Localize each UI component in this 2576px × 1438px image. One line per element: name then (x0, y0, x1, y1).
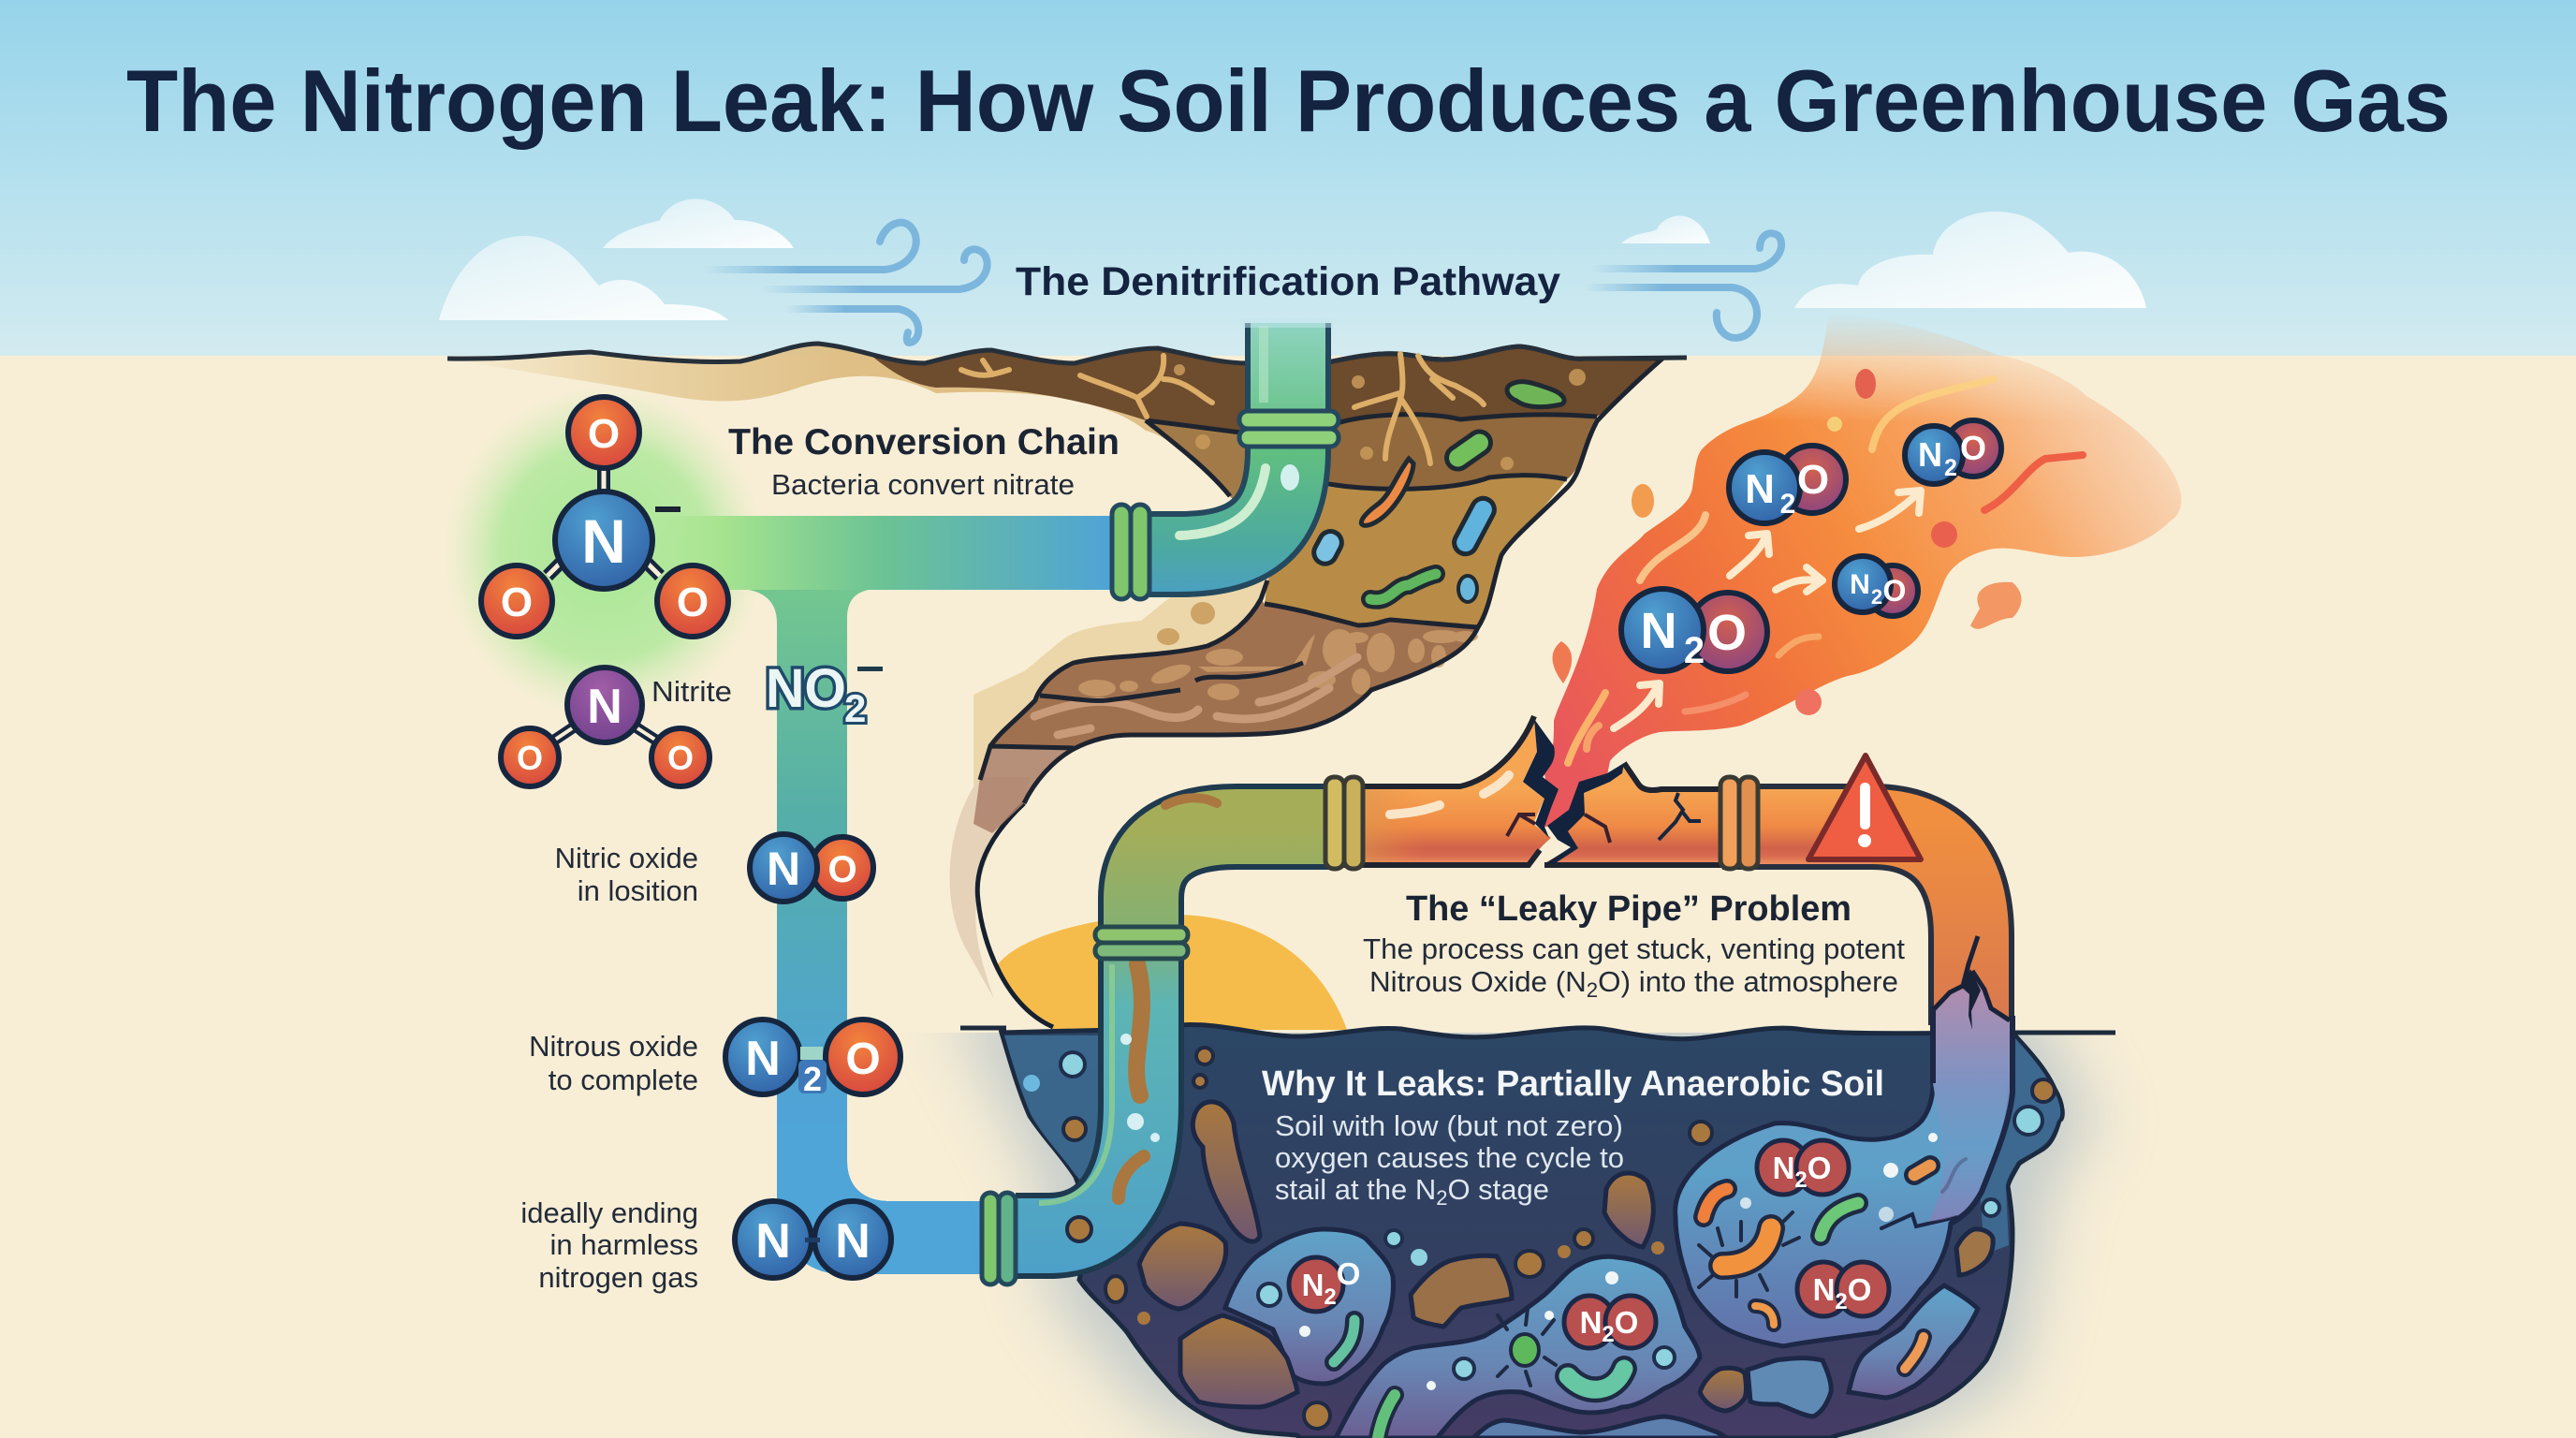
pipe segment: horizontal run (646, 516, 1114, 590)
plume molecule medium: 2 (1780, 489, 1795, 520)
leaky pipe description (1363, 932, 1905, 1002)
anaerobic soil description (1275, 1109, 1624, 1210)
plume molecule top: N (1918, 435, 1942, 474)
molecule: nitric oxide (750, 834, 873, 902)
soil left bright patch (1004, 1035, 1105, 1208)
nitrogen gas label (520, 1196, 698, 1294)
pocket: N2O molecules: O (1848, 1272, 1871, 1307)
broken pipe: left piece (1329, 716, 1551, 863)
broken pipe: outlines (1329, 716, 1741, 865)
pipe elbow to surface (1112, 318, 1339, 599)
pipe: lower elbow and vertical (1016, 827, 1329, 1236)
plume droplets (1552, 369, 2021, 715)
small blue cell (1458, 576, 1477, 602)
pipe: leaky section (1016, 798, 2012, 1241)
pocket: N2O molecules: O (1808, 1151, 1831, 1185)
green capsule (1442, 427, 1495, 474)
ochre layer (1265, 476, 1567, 627)
molecule: nitric oxide: N (767, 843, 800, 895)
anaerobic soil description: oxygen causes the cycle to (1275, 1141, 1624, 1174)
nitric oxide label: in losition (578, 874, 698, 907)
nitric oxide label (555, 842, 698, 907)
leaky pipe heading: The “Leaky Pipe” Problem (1406, 889, 1852, 929)
nitrogen gas label: nitrogen gas (538, 1261, 698, 1294)
anaerobic soil zone (1002, 1011, 2062, 1438)
small blue capsule (1310, 527, 1346, 567)
sky fade on pipe top (1240, 318, 1334, 328)
pocket: N2O molecules: N (1302, 1268, 1324, 1302)
plume molecule small: N (1850, 569, 1870, 600)
band markings (1078, 629, 1478, 700)
molecule: nitrite (501, 668, 710, 786)
gas pocket right merged with pipe outlet (1676, 1011, 2010, 1346)
molecule: nitrate: O (588, 411, 620, 457)
pocket: N2O molecules: 2 (1602, 1322, 1615, 1347)
plume molecule medium (1729, 446, 1846, 523)
pipe segment: bottom run tint (777, 1123, 985, 1274)
band root streaks (1034, 657, 1357, 735)
pipe: stone section sinking into soil (1928, 974, 2010, 1222)
sandy patch beneath horizontal pipe (973, 562, 1267, 786)
nitrous oxide label: Nitrous oxide (529, 1030, 698, 1063)
pocket: N2O molecules (1289, 1140, 1889, 1348)
panel outline (977, 803, 1053, 1027)
surface horizon line (447, 344, 1687, 363)
NO2- formula: 2 (844, 686, 866, 730)
pipe: first stage, nitrate green glow (443, 386, 765, 719)
plume wisps (1568, 379, 2083, 763)
pebbles (1157, 364, 1586, 645)
nitric oxide label: Nitric oxide (555, 842, 698, 874)
lower wedge (973, 746, 1074, 833)
conversion chain heading: The Conversion Chain (728, 422, 1120, 462)
medium brown layer (1328, 415, 1597, 489)
pipe collar horizontal (1112, 505, 1149, 599)
anaerobic soil description: stail at the N (1275, 1173, 1436, 1206)
molecule: nitrous oxide: O (845, 1034, 881, 1084)
top dark layer right of pipe (1328, 346, 1662, 426)
pipe collars upper (1325, 777, 1758, 869)
molecule: nitrous oxide (725, 1020, 900, 1098)
plume molecule medium: O (1797, 457, 1829, 503)
dark topsoil left (871, 348, 1248, 433)
lower brown band (993, 599, 1478, 749)
pocket: N2O molecules: 2 (1794, 1167, 1808, 1193)
NO2- formula: NO (766, 658, 846, 719)
soil haze around anaerobic zone (1002, 1033, 2059, 1438)
anaerobic soil description: Soil with low (but not zero) (1275, 1109, 1623, 1142)
wind swirls (704, 223, 1781, 343)
pocket: bacteria (1334, 1159, 1966, 1438)
soil haze behind panel (950, 777, 1030, 999)
molecule: nitrite: N (587, 680, 622, 734)
pipe collar vertical (1239, 411, 1339, 447)
tan surface layer (449, 344, 1248, 506)
gas pocket bottom (1473, 1416, 1727, 1438)
green blob (1507, 382, 1564, 407)
title: The Nitrogen Leak: How Soil Produces a Greenhouse Gas (126, 51, 2451, 150)
leaky pipe description: Nitrous Oxide (N (1369, 965, 1584, 998)
broken pipe: left tint (1329, 789, 1423, 863)
pocket: N2O molecules: 2 (1835, 1289, 1848, 1314)
molecule: nitrate: O (501, 580, 533, 625)
orange worm (1361, 459, 1413, 525)
broken pipe: right piece (1544, 763, 1741, 863)
plume arrows (1614, 491, 1921, 728)
leaky pipe description: O) into the atmosphere (1598, 965, 1898, 998)
leaky pipe description: The process can get stuck, venting potent (1363, 932, 1905, 965)
anaerobic soil heading: Why It Leaks: Partially Anaerobic Soil (1262, 1064, 1884, 1104)
plume molecule large: N (1640, 603, 1677, 659)
pipe collar lower (982, 1193, 1016, 1284)
pipe highlights (1390, 775, 1509, 814)
gas pocket lower right (1849, 1285, 1978, 1398)
nitrogen gas label: ideally ending (520, 1196, 698, 1229)
plume molecule large (1621, 589, 1767, 671)
sky background (0, 0, 2576, 356)
crack: right branch (1585, 814, 1610, 843)
crack: left branch (1507, 814, 1535, 836)
soil pebbles and bubbles (1023, 1048, 2055, 1429)
conversion chain caption: Bacteria convert nitrate (771, 468, 1075, 501)
molecule: nitrate: O (677, 580, 709, 625)
plume molecule top: O (1960, 429, 1986, 467)
pocket: N2O molecules: N (1813, 1272, 1835, 1307)
N2O gas plume (1540, 313, 2181, 829)
molecule: nitrate: N (581, 506, 626, 576)
pocket: N2O molecules: N (1773, 1151, 1794, 1185)
plume molecule medium: N (1745, 466, 1775, 512)
pocket: N2O molecules: O (1615, 1305, 1638, 1340)
yellow sun (998, 915, 1347, 1030)
cross-section of upper soil (447, 344, 1687, 833)
molecule: nitrogen gas (735, 1201, 891, 1278)
leaky pipe description: 2 (1587, 978, 1598, 1002)
molecule: nitrous oxide: N (745, 1032, 781, 1086)
molecule: nitric oxide: O (827, 849, 857, 890)
blue capsule (1450, 494, 1499, 558)
molecule: nitrite: O (667, 739, 694, 777)
roots (961, 354, 1484, 463)
gas pocket left (1225, 1229, 1393, 1384)
soil outline (980, 346, 1662, 803)
section heading: denitrification pathway: The Denitrification Pathway (1016, 259, 1560, 304)
molecule: nitrogen gas: N (755, 1214, 791, 1269)
anaerobic soil description: O stage (1447, 1173, 1549, 1206)
plume molecule small (1835, 556, 1918, 616)
pipe: conversion chain horizontal and vertical (646, 516, 1114, 1274)
NO2- formula (766, 658, 883, 730)
molecule: nitrous oxide: 2 (803, 1060, 822, 1098)
sand background (0, 356, 2576, 1438)
gas pocket middle (1336, 1256, 1700, 1438)
pipe stone crack (1934, 936, 2010, 1020)
pocket: N2O molecules: 2 (1324, 1284, 1337, 1310)
plume molecule small: 2 (1871, 585, 1882, 609)
pocket: N2O molecules: N (1580, 1305, 1602, 1340)
crack: right dark edge (1544, 763, 1624, 864)
pipe segment: vertical run (739, 589, 985, 1274)
nitrogen gas label: in harmless (550, 1228, 698, 1261)
pipe: right elbow (1722, 827, 1971, 1025)
soil rocks (1139, 1102, 1993, 1416)
plume molecule top (1905, 420, 2001, 484)
clouds (439, 198, 2146, 320)
soil right bright patch (1980, 1035, 2060, 1255)
nitrite label: Nitrite (651, 675, 732, 708)
plume molecule large: O (1707, 605, 1747, 661)
pocket: N2O molecules: O (1337, 1256, 1360, 1291)
soil surface line (960, 1028, 2115, 1033)
pipe collar vertical (1095, 927, 1188, 959)
molecule: nitrate (481, 397, 728, 637)
mid layer left of pipe (1146, 420, 1254, 524)
crack: left dark edge (1523, 719, 1559, 838)
molecule: nitrogen gas: N (835, 1214, 871, 1269)
anaerobic soil description: 2 (1436, 1186, 1447, 1210)
pipe stone tear (1961, 969, 1981, 1030)
molecule: nitrite: O (517, 739, 543, 777)
plume molecule large: 2 (1684, 630, 1705, 671)
plume molecule small: O (1883, 574, 1906, 608)
warning sign (1808, 756, 1921, 859)
nitrous oxide label (529, 1030, 698, 1096)
plume molecule top: 2 (1944, 455, 1957, 481)
small pipe crack (1659, 793, 1701, 840)
cracked orange pipe run (982, 716, 1758, 1284)
green worm (1370, 574, 1436, 600)
nitrous oxide label: to complete (549, 1064, 698, 1096)
pipe edge lines in soil (1933, 1006, 2012, 1224)
